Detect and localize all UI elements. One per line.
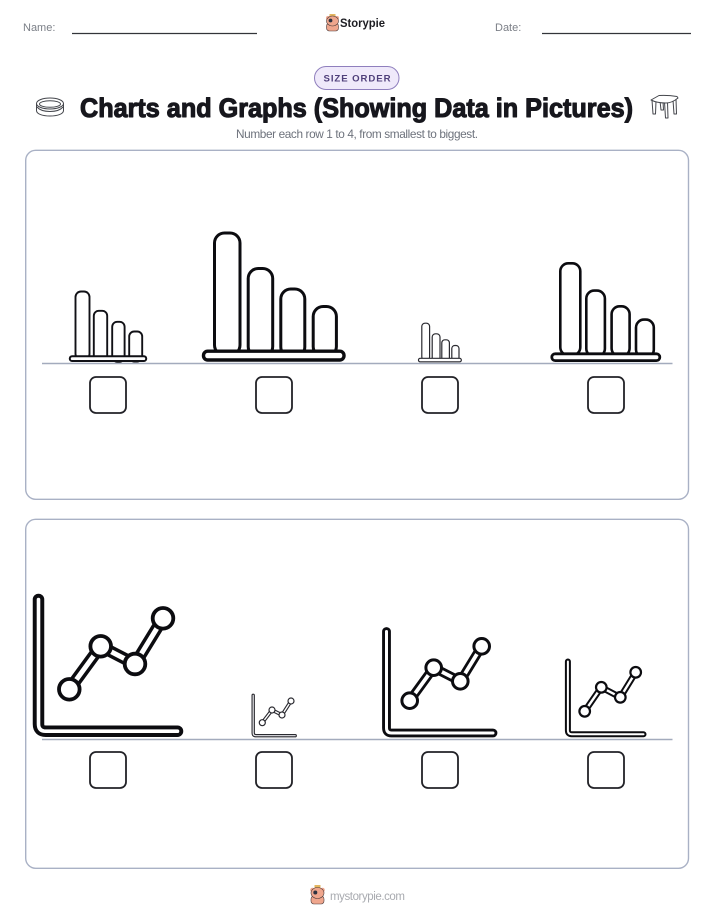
title: Charts and Graphs (Showing Data in Pictures) [80, 93, 633, 123]
icon: ring [36, 98, 64, 116]
bar chart: smallest [418, 323, 461, 362]
answer box 3 [422, 377, 458, 413]
answer box 8 [588, 752, 624, 788]
line chart: biggest [38, 600, 178, 731]
footer: website: mystorypie.com [330, 891, 405, 903]
footer: bear icon [310, 885, 325, 904]
line chart: smallest [253, 695, 295, 736]
answer box 1 [90, 377, 126, 413]
bar chart: second biggest [552, 263, 660, 361]
header: Storypie logo: Storypie [340, 16, 385, 30]
answer box 5 [90, 752, 126, 788]
answer box 6 [256, 752, 292, 788]
answer box 7 [422, 752, 458, 788]
header: name field: Name: [23, 22, 55, 34]
answer box 2 [256, 377, 292, 413]
panel: bar charts [26, 150, 688, 499]
icon: stool [651, 95, 678, 118]
bar chart: biggest [204, 233, 344, 360]
header: date field: Date: [495, 22, 521, 34]
subtitle: Number each row 1 to 4, from smallest to biggest. [236, 127, 478, 141]
header: Storypie logo [326, 14, 385, 31]
answer box 4 [588, 377, 624, 413]
line chart: second smallest [568, 662, 644, 734]
badge: size order [314, 66, 399, 90]
badge: size order: SIZE ORDER [324, 74, 391, 84]
bar chart: second smallest [70, 292, 146, 362]
panel: line charts [26, 519, 688, 868]
line chart: second biggest [386, 632, 493, 733]
